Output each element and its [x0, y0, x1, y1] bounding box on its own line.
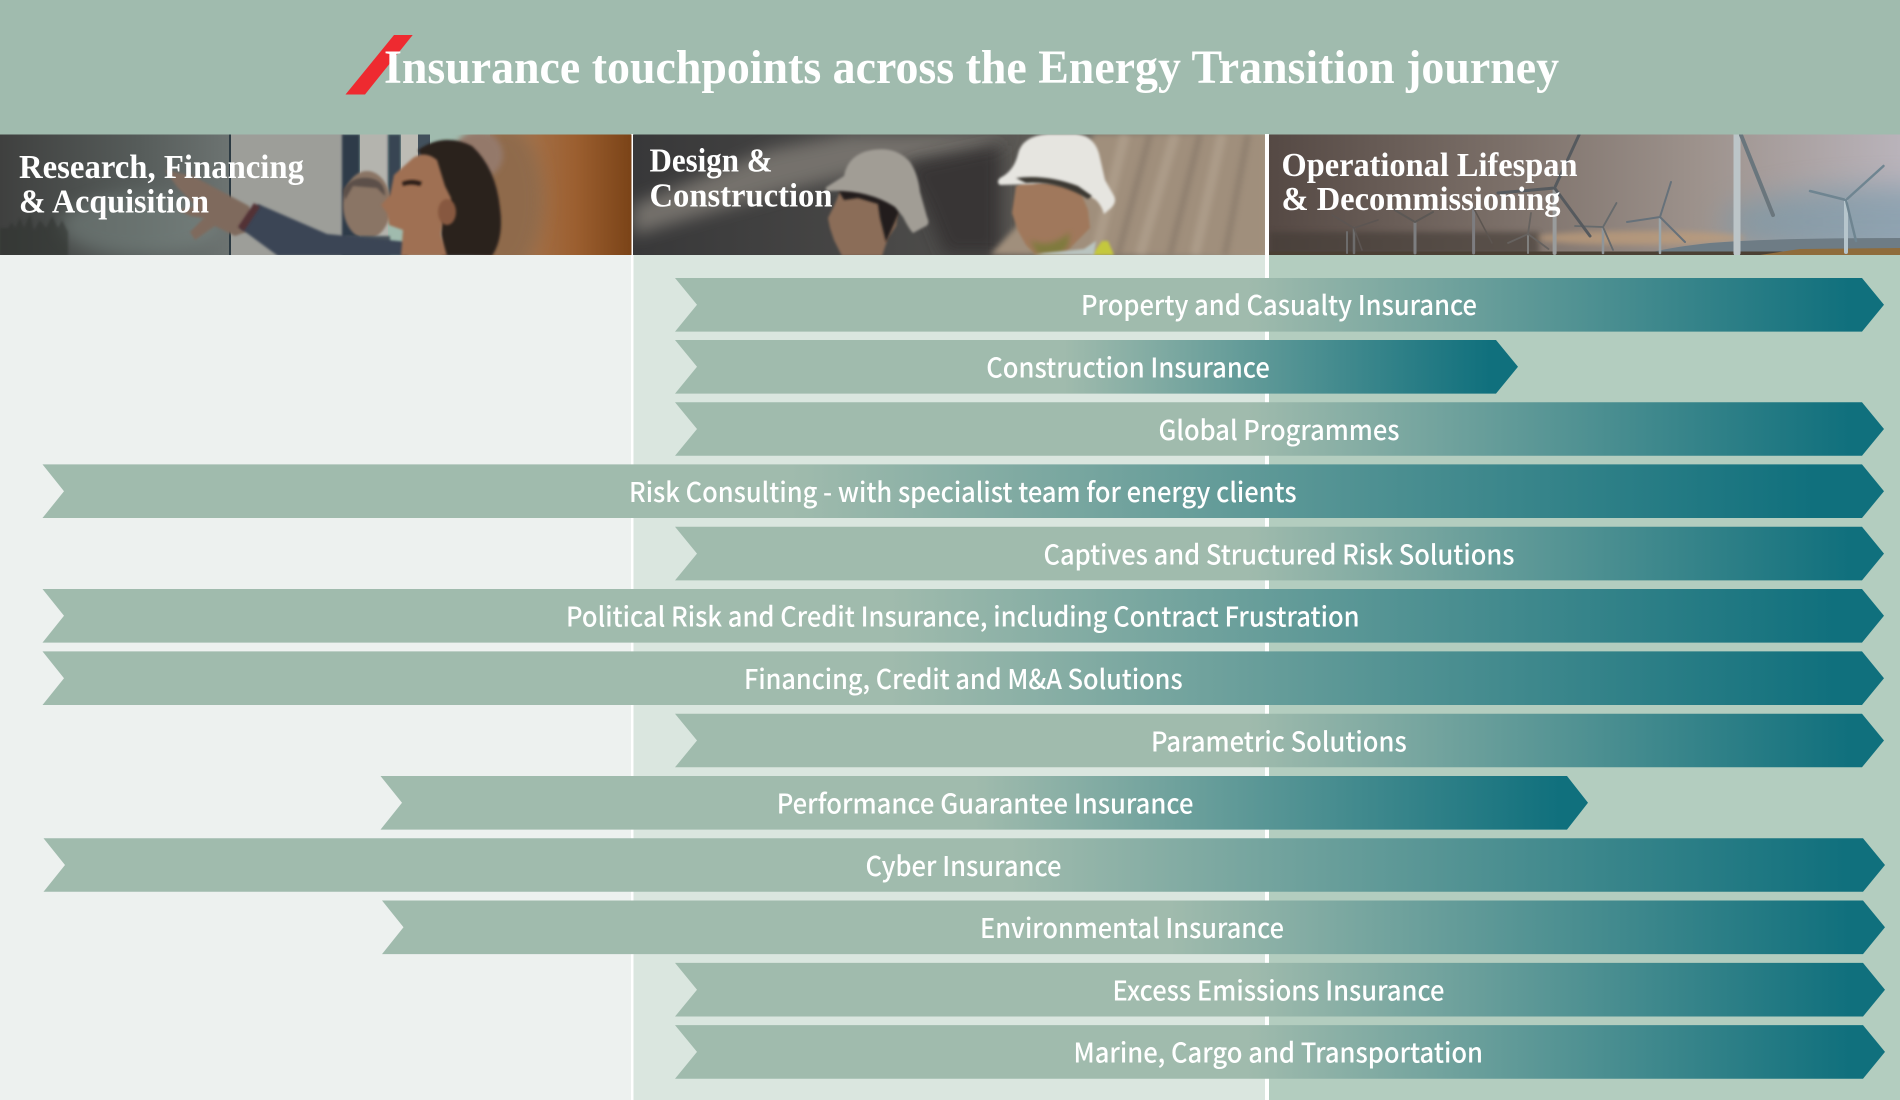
- panel heading: [19, 149, 304, 220]
- bar: Cyber Insurance: Cyber Insurance: [866, 845, 1062, 884]
- panel heading: [650, 148, 832, 207]
- bar: Financing, Credit and M&A Solutions: [42, 651, 1884, 705]
- panel heading: Research, Financing: [19, 149, 304, 186]
- bar: Environmental Insurance: Environmental Insurance: [980, 907, 1284, 946]
- bar: Global Programmes: Global Programmes: [1158, 409, 1400, 448]
- title: Insurance touchpoints across the Energy Transition journey: [384, 41, 1559, 94]
- panel: design and construction photo header: [633, 134, 1265, 256]
- bar: Marine, Cargo and Transportation: Marine, Cargo and Transportation: [1074, 1032, 1483, 1071]
- panel heading: & Decommissioning: [1282, 181, 1560, 218]
- bar: Property and Casualty Insurance: Property and Casualty Insurance: [1081, 284, 1477, 323]
- panel heading: & Acquisition: [19, 184, 209, 220]
- photo: two engineers in hard hats: [633, 134, 1265, 256]
- bar: Parametric Solutions: [675, 714, 1884, 767]
- bar: Excess Emissions Insurance: [675, 963, 1885, 1016]
- bar: Risk Consulting: Risk Consulting - with specialist team for energy clients: [629, 471, 1297, 510]
- bar: Captives and Structured Risk Solutions: Captives and Structured Risk Solutions: [1044, 533, 1514, 572]
- bar: Performance Guarantee Insurance: [380, 776, 1588, 830]
- header band: [0, 0, 1900, 135]
- panel heading: Construction: [650, 178, 833, 214]
- bar: Marine, Cargo and Transportation: [675, 1025, 1885, 1079]
- panel heading: [1282, 147, 1578, 218]
- panel: research, financing and acquisition photo header: [0, 134, 632, 255]
- bar: Political Risk and Credit Insurance: [42, 589, 1884, 643]
- bar: Captives and Structured Risk Solutions: [675, 527, 1884, 580]
- bar: Property and Casualty Insurance: [675, 278, 1884, 332]
- bar: Excess Emissions Insurance: Excess Emissions Insurance: [1112, 969, 1444, 1008]
- bar: Political Risk and Credit Insurance: Political Risk and Credit Insurance, including Contract Frustration: [566, 596, 1360, 635]
- panel heading: Operational Lifespan: [1282, 147, 1578, 184]
- column background: operational lifespan and decommissioning: [1269, 255, 1900, 1100]
- bar: Financing, Credit and M&A Solutions: Financing, Credit and M&A Solutions: [744, 658, 1183, 697]
- icon: red slash logo: [346, 35, 413, 94]
- panel: operational lifespan and decommissioning photo header: [1269, 134, 1900, 258]
- bar: Risk Consulting: [42, 464, 1884, 518]
- bar: Parametric Solutions: Parametric Solutions: [1151, 720, 1407, 759]
- bar: Construction Insurance: [675, 340, 1518, 394]
- panel heading: Design &: [650, 142, 772, 180]
- photo: wind farm at dusk: [1269, 134, 1900, 258]
- bar: Global Programmes: [675, 402, 1884, 456]
- bar: Environmental Insurance: [382, 900, 1885, 954]
- bar: Construction Insurance: Construction Insurance: [986, 346, 1270, 386]
- bar: Performance Guarantee Insurance: Performance Guarantee Insurance: [777, 783, 1194, 822]
- photo: woman pointing at a whiteboard: [0, 134, 632, 255]
- column background: design and construction: [633, 255, 1265, 1100]
- column background: research, financing and acquisition: [0, 255, 632, 1100]
- bar: Cyber Insurance: [44, 838, 1885, 892]
